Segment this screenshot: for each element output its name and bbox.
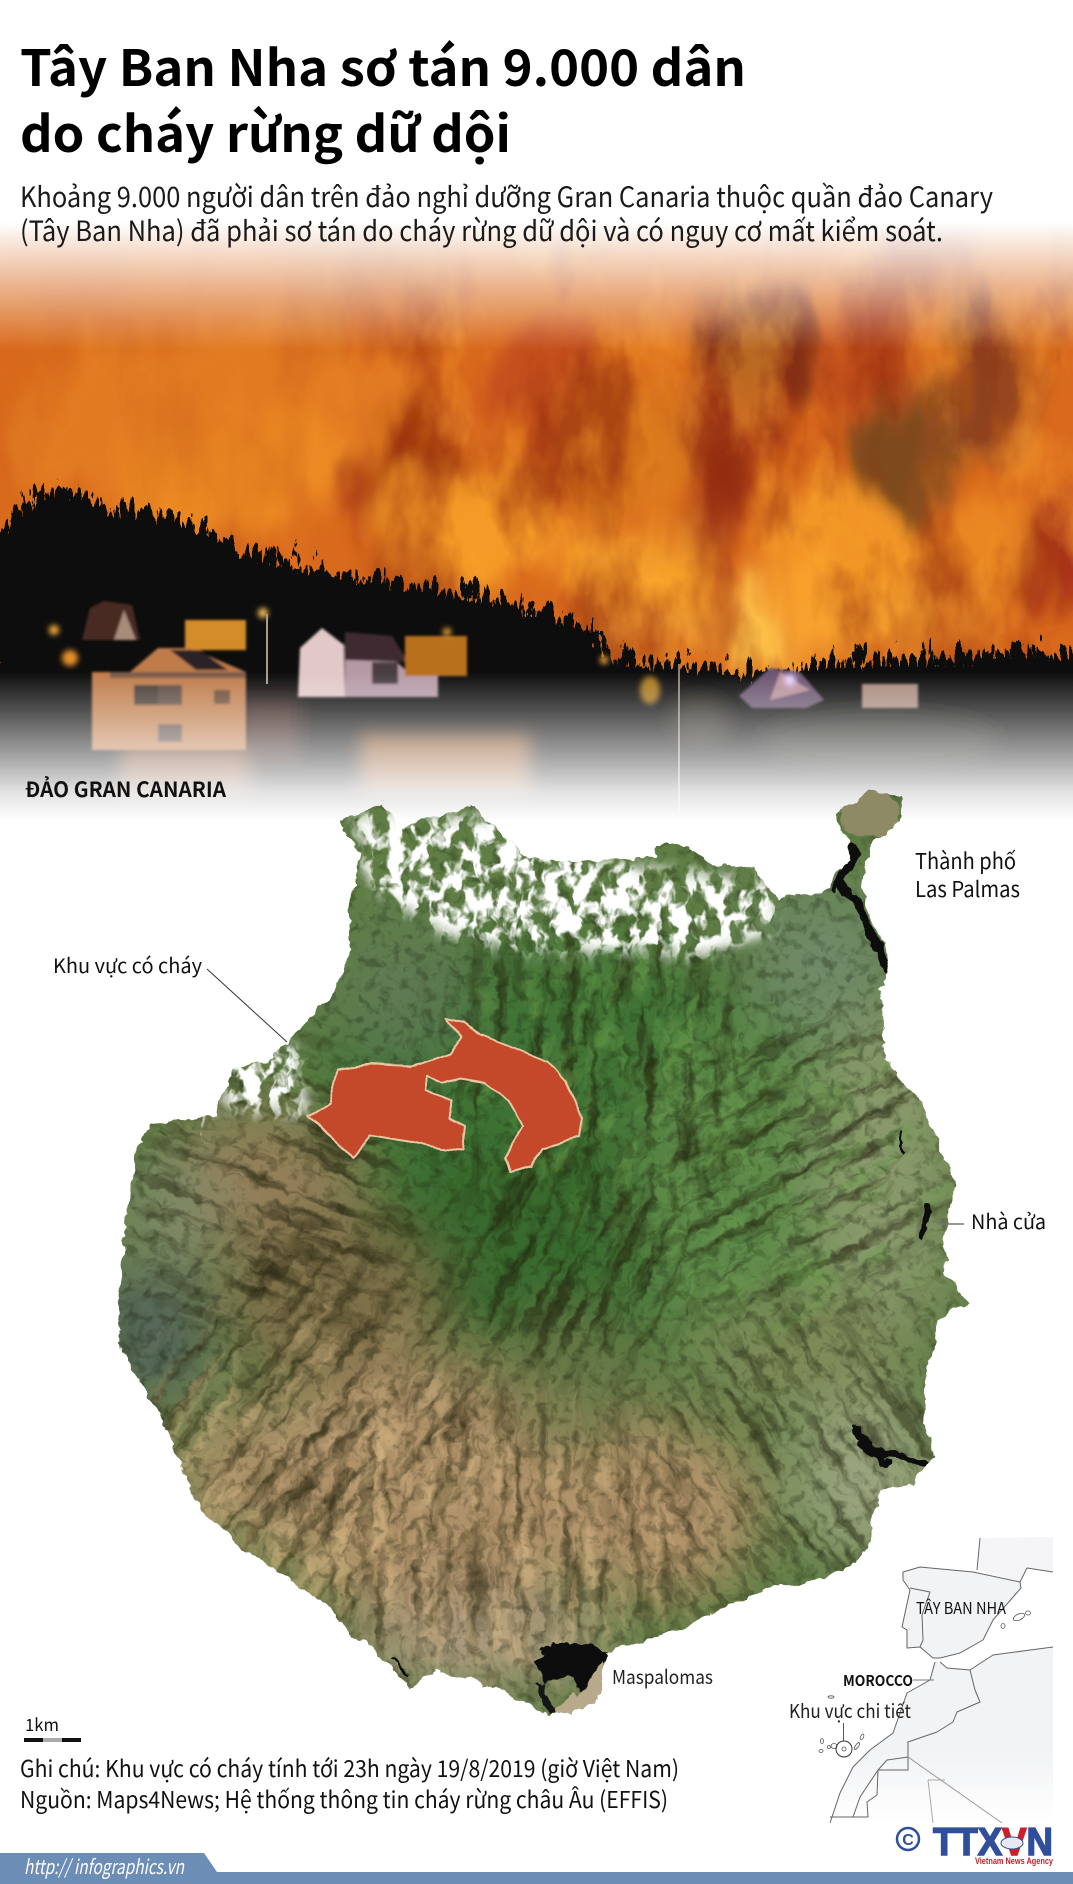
TTXVN logo: TTXVN bbox=[933, 1821, 1053, 1864]
bottom mist fade bbox=[0, 672, 1073, 821]
callout: houses bbox=[938, 1206, 1046, 1235]
TTXVN logo: Vietnam News Agency bbox=[975, 1856, 1053, 1866]
houses bbox=[82, 601, 918, 750]
title: do cháy rừng dữ dội bbox=[20, 95, 511, 167]
locator map: Khu vực chi tiết bbox=[789, 1697, 911, 1724]
north peninsula rock bbox=[838, 788, 898, 836]
scale bar bbox=[24, 1711, 81, 1742]
locator map: MOROCCO bbox=[843, 1670, 913, 1691]
TTXVN logo: C bbox=[902, 1832, 914, 1849]
callout: houses: Nhà cửa bbox=[971, 1206, 1046, 1235]
callout: Las Palmas: Las Palmas bbox=[915, 872, 1020, 904]
callout: Las Palmas bbox=[915, 844, 1020, 904]
section label: ĐẢO GRAN CANARIA bbox=[25, 774, 227, 804]
Canary islands bbox=[819, 1611, 1030, 1752]
callout: fire zone bbox=[53, 950, 287, 1042]
top mist fade bbox=[0, 222, 1073, 350]
ridge texture bbox=[122, 892, 954, 1704]
title: Tây Ban Nha sơ tán 9.000 dân bbox=[20, 29, 746, 101]
satellite map: Gran Canaria island bbox=[118, 790, 970, 1716]
locator map bbox=[789, 1537, 1053, 1823]
urban areas bbox=[392, 848, 926, 1672]
forest silhouette bbox=[0, 474, 1073, 830]
photo: forest fire behind village bbox=[0, 222, 1073, 830]
intro text: (Tây Ban Nha) đã phải sơ tán do cháy rừng dữ dội và có nguy cơ mất kiểm soát. bbox=[20, 210, 943, 250]
detail area marker bbox=[836, 1741, 852, 1757]
footer band bbox=[0, 1851, 1073, 1884]
intro text: Khoảng 9.000 người dân trên đảo nghỉ dưỡng Gran Canaria thuộc quần đảo Canary bbox=[20, 176, 993, 216]
burned area polygon bbox=[307, 1019, 582, 1173]
clouds bbox=[200, 806, 787, 1144]
footer band: http:// infographics.vn bbox=[24, 1851, 185, 1880]
scale bar: 1km bbox=[25, 1711, 59, 1736]
locator map: TÂY BAN NHA bbox=[916, 1595, 1006, 1619]
label: Maspalomas: Maspalomas bbox=[612, 1663, 713, 1690]
fine terrain grain bbox=[118, 793, 968, 1713]
note and source: Nguồn: Maps4News; Hệ thống thông tin cháy rừng châu Âu (EFFIS) bbox=[20, 1781, 668, 1815]
note and source: Ghi chú: Khu vực có cháy tính tới 23h ngày 19/8/2019 (giờ Việt Nam) bbox=[20, 1750, 679, 1784]
intro text bbox=[20, 176, 993, 250]
note and source bbox=[20, 1750, 679, 1815]
callout: Las Palmas: Thành phố bbox=[915, 844, 1016, 876]
callout: fire zone: Khu vực có cháy bbox=[53, 950, 203, 979]
lit house lower glow bbox=[120, 696, 1000, 795]
title bbox=[20, 29, 746, 167]
